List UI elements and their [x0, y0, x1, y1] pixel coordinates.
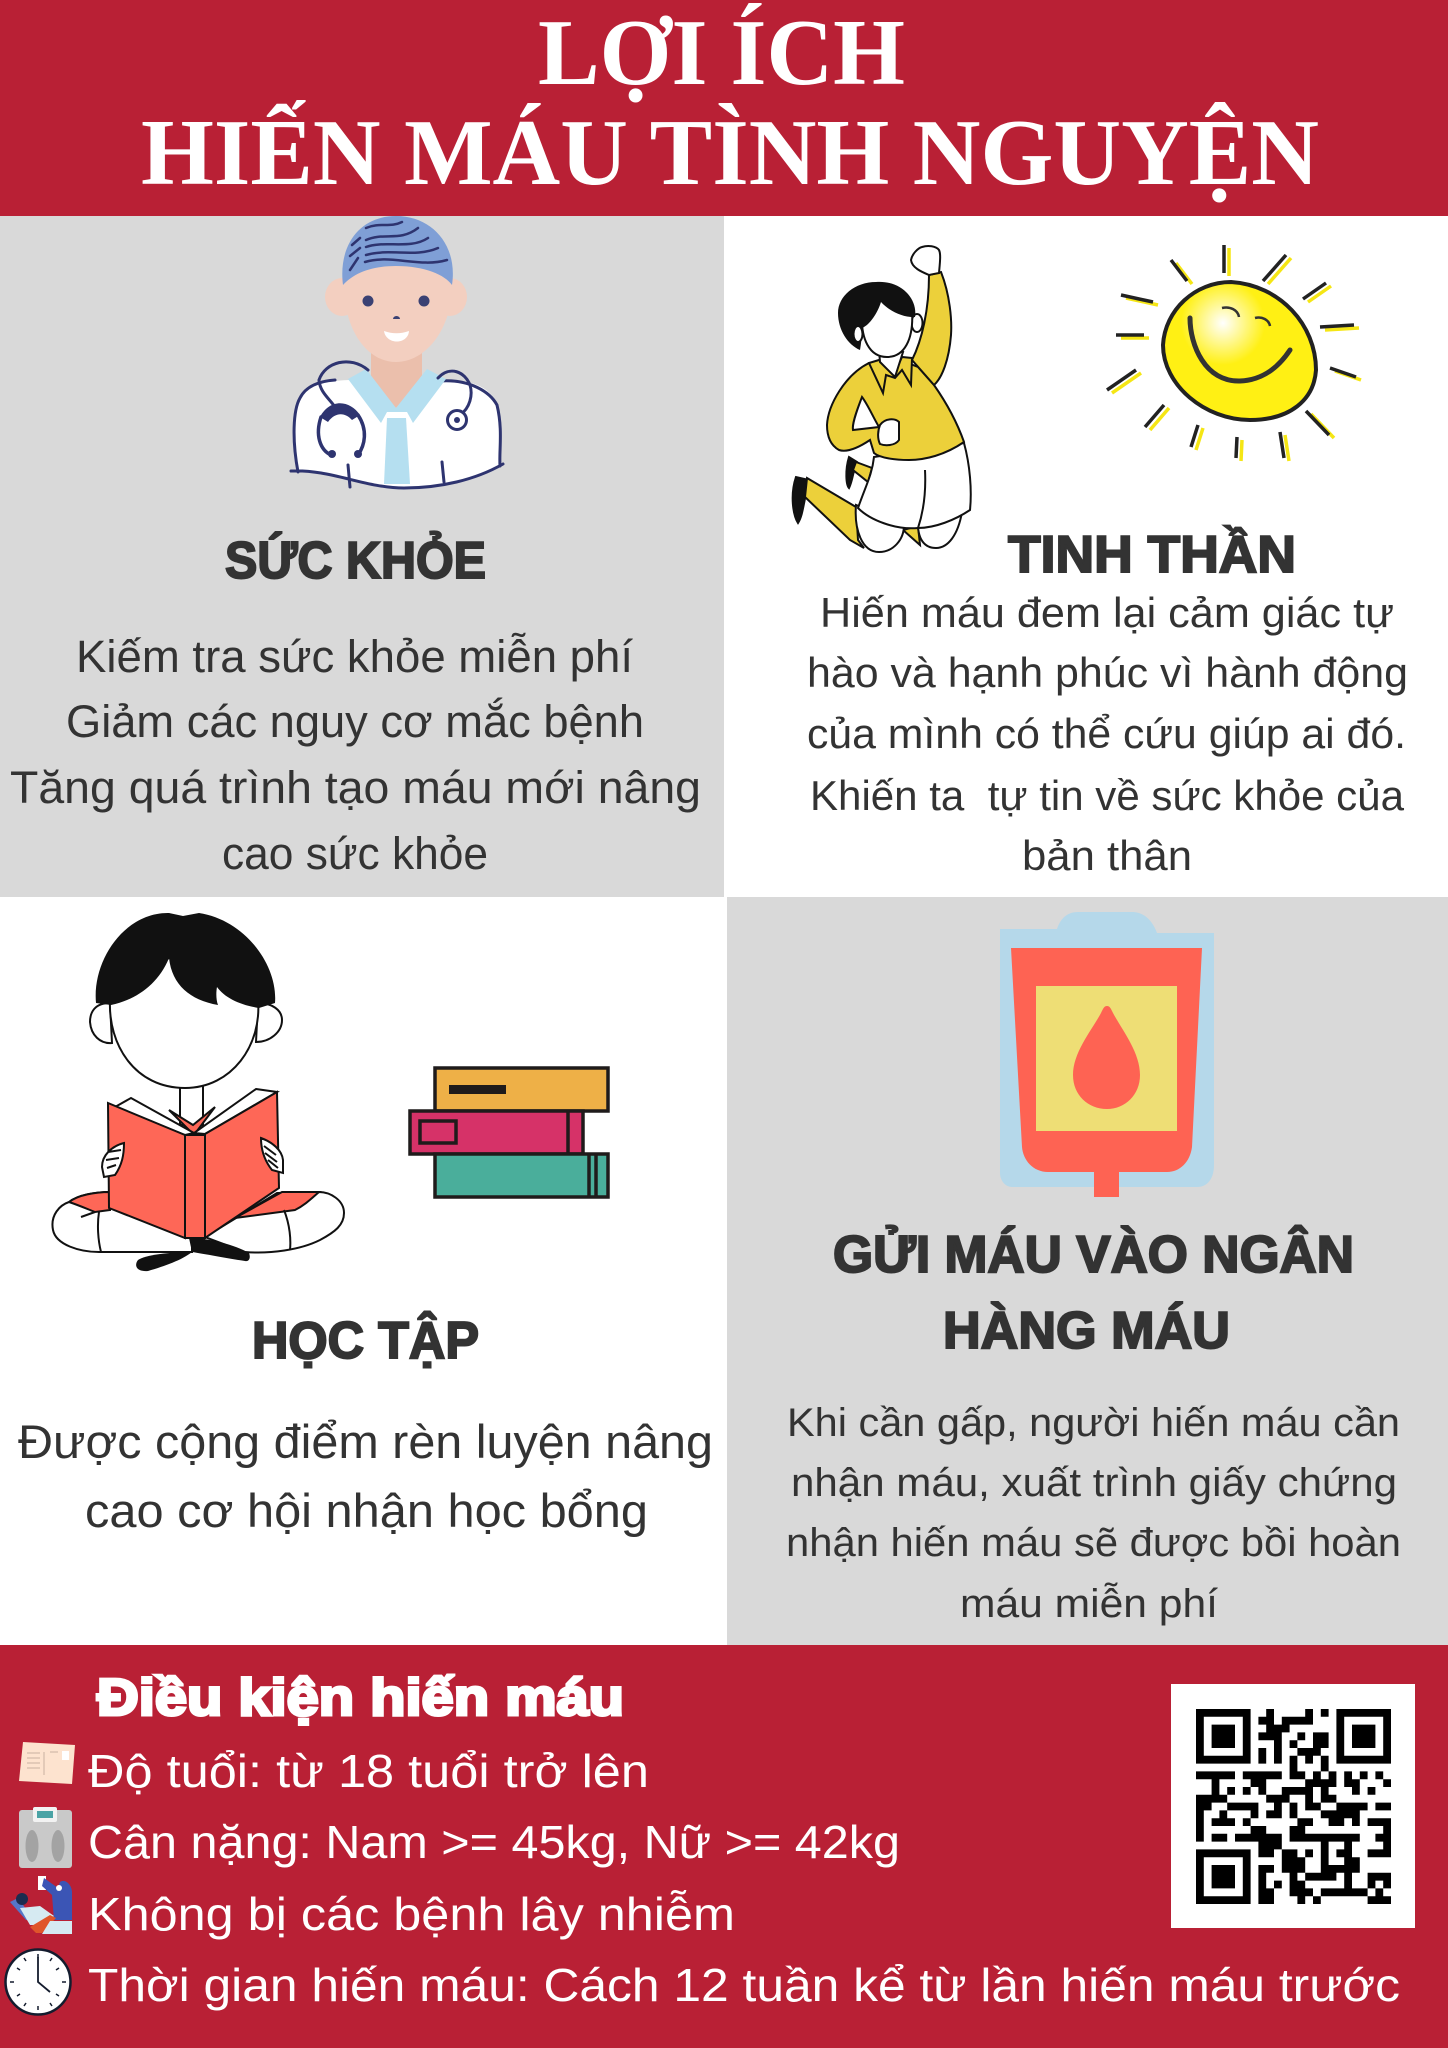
text: học tập benefits: Được cộng điểm rèn luyện nâng: [18, 1415, 713, 1468]
condition: weight: [19, 1807, 900, 1868]
condition: donation interval: [6, 1950, 1400, 2014]
panel: điều kiện hiến máu: [0, 1645, 1448, 2048]
text: tinh thần benefits: hào và hạnh phúc vì hành động: [807, 649, 1408, 696]
text: donation interval: Thời gian hiến máu: Cách 12 tuần kể từ lần hiến máu trước: [88, 1959, 1400, 2011]
text: ngân hàng máu benefits: nhận hiến máu sẽ được bồi hoàn: [786, 1521, 1401, 1565]
heading: gửi máu vào ngân hàng máu: GỬI MÁU VÀO NGÂN: [833, 1225, 1354, 1284]
text: sức khỏe benefits: Tăng quá trình tạo máu mới nâng: [10, 762, 701, 813]
title line 1: LỢI ÍCH: [538, 1, 905, 105]
panel: học tập: [0, 897, 727, 1645]
text: sức khỏe benefits: [10, 631, 701, 879]
heading: học tập: HỌC TẬP: [252, 1311, 479, 1370]
icon: scale: [19, 1807, 72, 1868]
text: tinh thần benefits: Hiến máu đem lại cảm giác tự: [820, 589, 1394, 636]
QR code: [1171, 1684, 1415, 1928]
text: sức khỏe benefits: cao sức khỏe: [222, 828, 488, 879]
condition: age: [19, 1742, 649, 1797]
icon: doctor: [291, 216, 503, 488]
icon: boy reading: [52, 913, 344, 1271]
panel: tinh thần: [724, 216, 1448, 897]
text: sức khỏe benefits: Kiếm tra sức khỏe miễn phí: [76, 631, 633, 682]
panel: sức khỏe: [0, 216, 724, 897]
text: ngân hàng máu benefits: Khi cần gấp, người hiến máu cần: [787, 1401, 1400, 1445]
icon: blood bag: [1000, 912, 1214, 1197]
text: weight: Cân nặng: Nam >= 45kg, Nữ >= 42kg: [88, 1816, 900, 1868]
text: age: Độ tuổi: từ 18 tuổi trở lên: [88, 1745, 649, 1797]
heading: sức khỏe: SỨC KHỎE: [225, 531, 486, 590]
condition: no infectious disease: [10, 1876, 735, 1940]
title line 2: HIẾN MÁU TÌNH NGUYỆN: [141, 101, 1319, 205]
icon: postcard: [19, 1742, 75, 1784]
text: học tập benefits: cao cơ hội nhận học bổng: [85, 1484, 648, 1537]
heading: gửi máu vào ngân hàng máu: HÀNG MÁU: [943, 1302, 1230, 1360]
text: tinh thần benefits: bản thân: [1022, 832, 1192, 879]
text: tinh thần benefits: Khiến ta tự tin về sức khỏe của: [810, 772, 1405, 819]
text: tinh thần benefits: của mình có thể cứu giúp ai đó.: [807, 710, 1406, 757]
title banner: [0, 0, 1448, 216]
text: ngân hàng máu benefits: nhận máu, xuất trình giấy chứng: [791, 1461, 1397, 1505]
heading: gửi máu vào ngân hàng máu: [833, 1225, 1354, 1360]
text: ngân hàng máu benefits: máu miễn phí: [960, 1581, 1218, 1626]
icon: stack of books: [410, 1068, 608, 1197]
heading: điều kiện hiến máu: Điều kiện hiến máu: [97, 1669, 624, 1727]
icon: medical check: [10, 1876, 72, 1934]
text: ngân hàng máu benefits: [786, 1401, 1401, 1626]
text: học tập benefits: [18, 1415, 713, 1537]
icon: clock: [6, 1950, 70, 2014]
icon: jumping person: [793, 246, 971, 552]
text: no infectious disease: Không bị các bệnh lây nhiễm: [88, 1888, 735, 1940]
panel: gửi máu vào ngân hàng máu: [727, 897, 1448, 1645]
heading: tinh thần: TINH THẦN: [1008, 525, 1296, 584]
icon: smiling sun: [1107, 245, 1361, 461]
text: sức khỏe benefits: Giảm các nguy cơ mắc bệnh: [66, 696, 644, 747]
text: tinh thần benefits: [807, 589, 1408, 879]
